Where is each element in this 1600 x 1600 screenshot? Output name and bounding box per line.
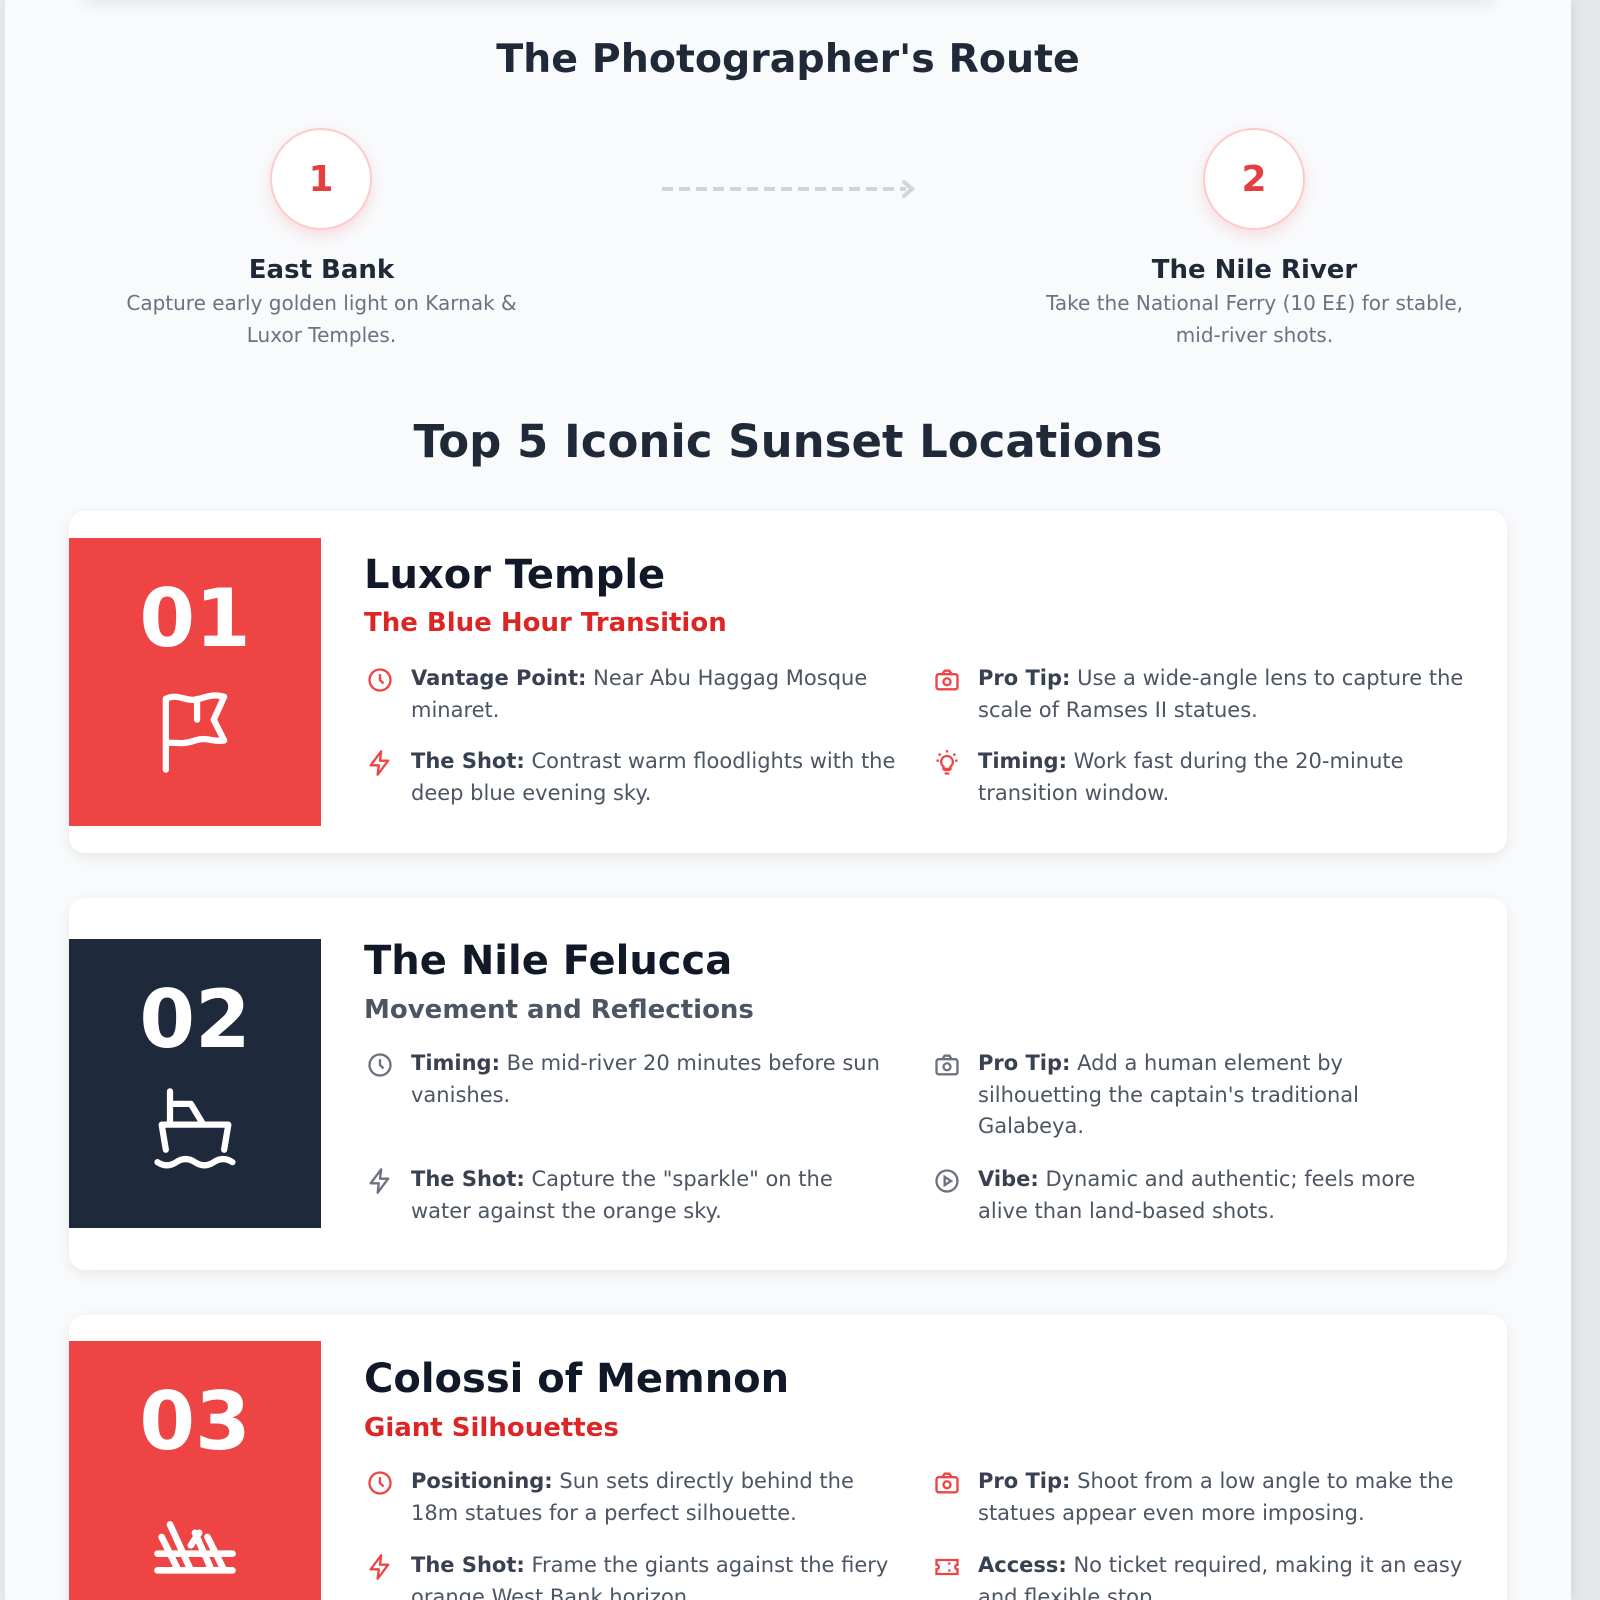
stop: The Nile River — [1046, 255, 1463, 346]
number badge 03 — [69, 1341, 321, 1600]
icon: flag — [162, 692, 228, 773]
heading: Top 5 Iconic Sunset Locations: Top 5 Iconic Sunset Locations — [414, 415, 1162, 468]
item: Pro Tip: Pro Tip: Use a wide-angle lens to capture the scale of Ramses II statues. — [978, 666, 1463, 722]
step 1 circle — [270, 128, 372, 230]
title: The Photographer's Route: The Photographer's Route — [496, 36, 1080, 82]
stop: The Nile River: The Nile River — [1152, 255, 1357, 285]
item: The Shot: The Shot: Contrast warm floodlights with the deep blue evening sky. — [411, 749, 895, 805]
arrow: dashed route arrow — [662, 180, 915, 198]
item: Positioning: Positioning: Sun sets directly behind the 18m statues for a perfect silhouette. — [411, 1469, 854, 1525]
step 1 circle: 1 — [308, 158, 334, 200]
card 3 subtitle: Giant Silhouettes — [364, 1413, 619, 1443]
item: Timing: Timing: Work fast during the 20-minute transition window. — [978, 749, 1404, 805]
item: Vantage Point: Vantage Point: Near Abu Haggag Mosque minaret. — [411, 666, 867, 722]
card 2 title: The Nile Felucca — [364, 938, 732, 984]
number badge 02: 02 — [139, 973, 251, 1066]
card 1 subtitle: The Blue Hour Transition — [364, 608, 727, 638]
icon: boat — [154, 1088, 236, 1168]
number badge 02 — [69, 939, 321, 1228]
stop: East Bank: Capture early golden light on Karnak & Luxor Temples. — [126, 291, 517, 346]
icon: colossi — [154, 1521, 236, 1574]
number badge 01 — [69, 538, 321, 826]
stop: East Bank: East Bank — [249, 255, 394, 285]
stop: The Nile River: Take the National Ferry (10 E£) for stable, mid-river shots. — [1046, 291, 1463, 346]
number badge 01: 01 — [139, 572, 251, 665]
number badge 03: 03 — [139, 1375, 251, 1468]
stop: East Bank — [126, 255, 517, 346]
card 3 title: Colossi of Memnon — [364, 1356, 789, 1402]
card 2: The Nile Felucca — [69, 898, 1507, 1270]
step 2 circle: 2 — [1241, 158, 1267, 200]
card 3: Colossi of Memnon — [69, 1315, 1507, 1600]
card 1 title: Luxor Temple — [364, 552, 665, 598]
item: Vibe: Vibe: Dynamic and authentic; feels more alive than land-based shots. — [978, 1167, 1415, 1223]
item: Timing: Timing: Be mid-river 20 minutes before sun vanishes. — [411, 1051, 880, 1107]
card 1: Luxor Temple — [69, 511, 1507, 853]
item: Pro Tip: Pro Tip: Shoot from a low angle to make the statues appear even more imposing. — [978, 1469, 1454, 1525]
step 2 circle — [1203, 128, 1305, 230]
item: The Shot: The Shot: Capture the "sparkle" on the water against the orange sky. — [411, 1167, 833, 1223]
item: Pro Tip: Pro Tip: Add a human element by silhouetting the captain's traditional Galabeya. — [978, 1051, 1359, 1138]
card 2 subtitle: Movement and Reflections — [364, 995, 754, 1025]
